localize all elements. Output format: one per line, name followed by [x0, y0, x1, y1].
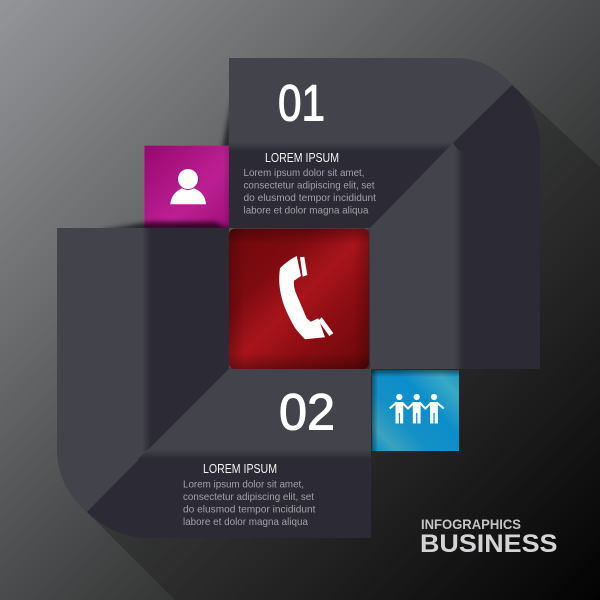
body text 02: labore et dolor magna aliqua [183, 516, 308, 528]
panel: step 02 ribbon [87, 369, 371, 538]
left ribbon light face [57, 228, 147, 512]
number 01: 01 [278, 74, 325, 132]
title line 1: INFOGRAPHICS [421, 516, 521, 532]
panel: step 01 ribbon [229, 58, 512, 228]
body text 01: do elusmod tempor incididunt [244, 192, 376, 204]
body text 01: Lorem ipsum dolor sit amet, [244, 167, 364, 179]
body text 02: do elusmod tempor incididunt [183, 504, 316, 516]
panel shadow: top ribbon edge [222, 95, 232, 150]
left ribbon dark face [147, 228, 229, 451]
body text 02: Lorem ipsum dolor sit amet, [183, 478, 304, 490]
number 02: 02 [279, 384, 335, 440]
long shadow [87, 85, 600, 600]
title: infographics business [420, 516, 558, 558]
right ribbon dark face [453, 85, 540, 369]
heading 01: LOREM IPSUM [265, 151, 339, 165]
body text 01: labore et dolor magna aliqua [244, 204, 369, 216]
ribbon text band [87, 452, 371, 538]
icon: telephone handset [279, 256, 333, 339]
panel shadow: left ribbon edge [95, 222, 232, 231]
body text 01: consectetur adipiscing elit, set [244, 180, 375, 192]
panel: magenta icon tile [144, 146, 230, 228]
panel: blue icon tile [372, 370, 459, 451]
panel: central red tile [229, 228, 369, 369]
panel: left ribbon [57, 228, 229, 512]
right ribbon light face [370, 143, 458, 369]
icon: three people holding hands [390, 394, 444, 424]
body text 01 [244, 167, 376, 216]
panel: right ribbon [370, 85, 540, 369]
body text 02 [183, 478, 316, 528]
ribbon text band [229, 146, 453, 228]
body text 02: consectetur adipiscing elit, set [183, 491, 314, 503]
title line 2: BUSINESS [420, 530, 558, 558]
icon: person [170, 168, 206, 204]
heading 02: LOREM IPSUM [203, 462, 277, 476]
ribbon top face [229, 58, 512, 146]
ribbon top face [146, 369, 371, 452]
